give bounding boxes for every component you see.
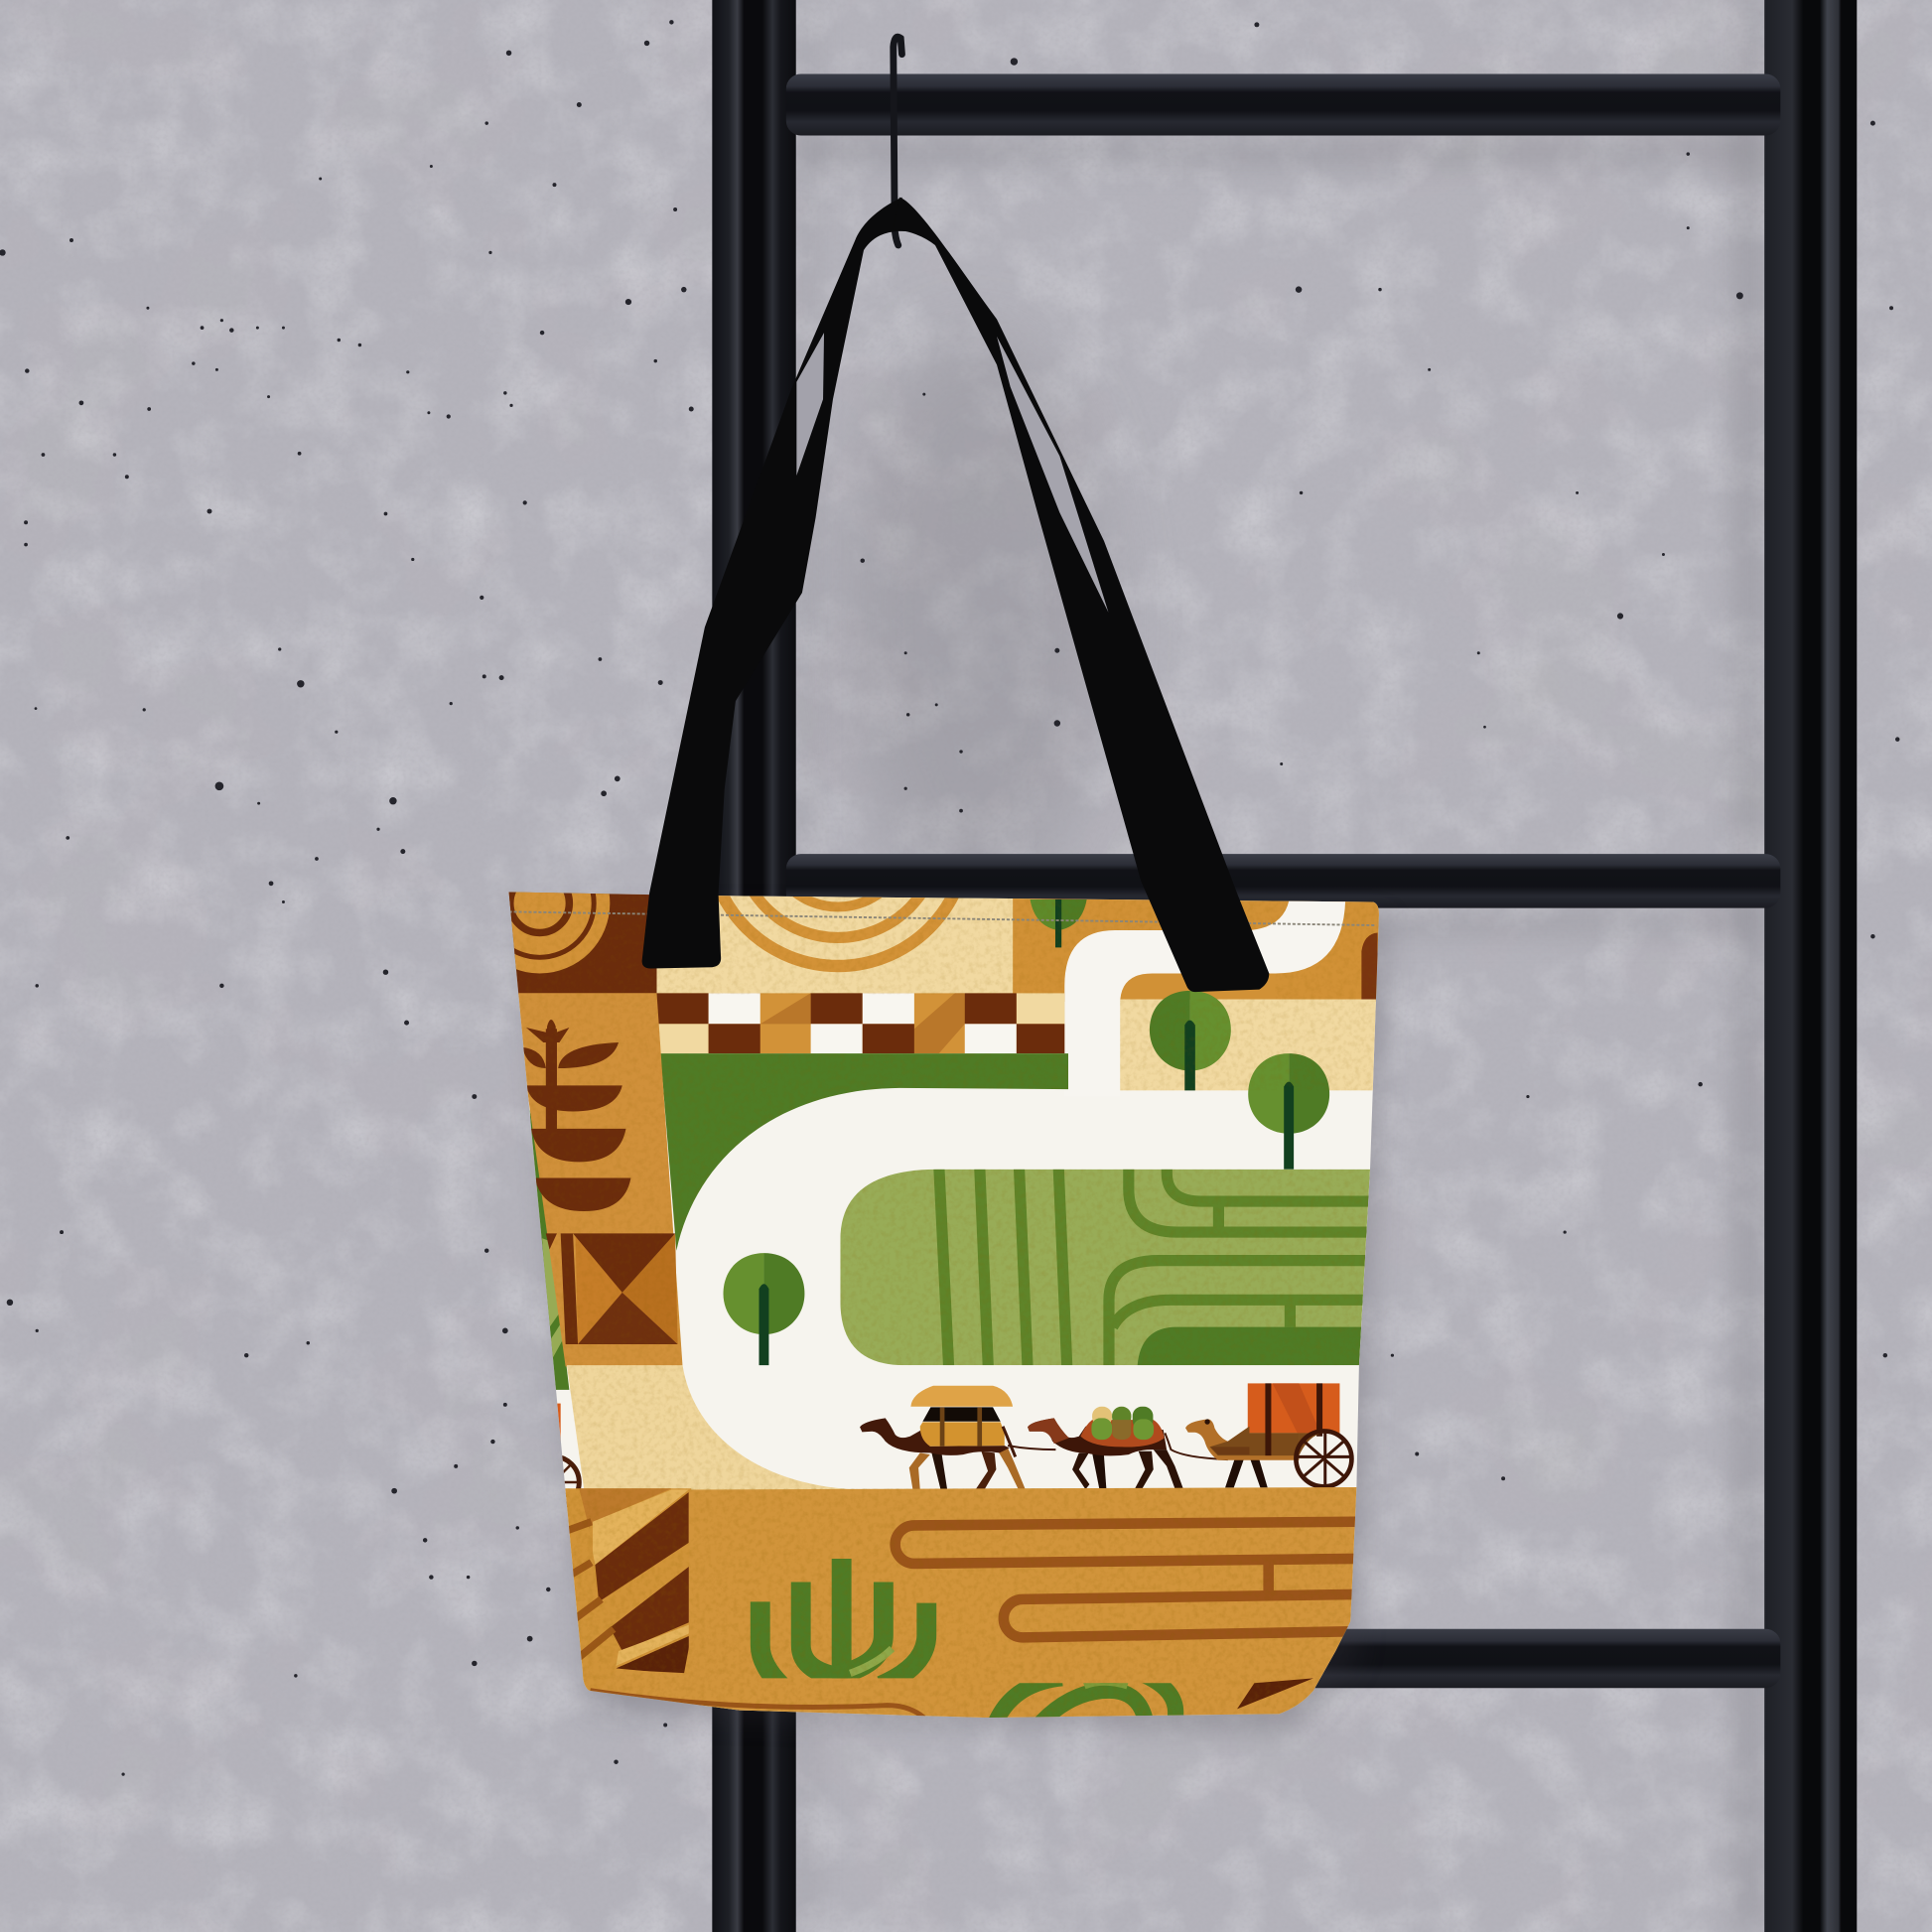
panel: dark green corner <box>660 1053 1068 1251</box>
icon: corner triangle <box>1237 1678 1313 1709</box>
icon: hourglass triangles <box>546 1233 678 1344</box>
camel with bags <box>1028 1407 1228 1489</box>
panel: lower orange band <box>573 1487 1368 1725</box>
lower panel texture <box>554 1488 1392 1734</box>
side gusset: wagon fragment <box>557 1404 582 1507</box>
tree cut at top <box>1031 899 1087 947</box>
tree: right <box>1248 1053 1329 1170</box>
bag shadow on wall <box>523 911 1386 1731</box>
top stitching <box>509 911 1376 925</box>
caravan <box>860 1383 1351 1489</box>
wagon wheel <box>1296 1431 1351 1486</box>
white road upper branch <box>1064 895 1345 1097</box>
field stripes <box>939 1165 1374 1368</box>
panel: cream with arcs <box>657 896 1013 993</box>
camel with wagon <box>1185 1383 1351 1487</box>
icon: lower cactus arches <box>996 1673 1175 1723</box>
front strap right <box>894 198 1269 992</box>
ladder: rungs <box>786 73 1780 1688</box>
icon: plant motif <box>522 1020 630 1211</box>
side gusset: green strip <box>530 1109 569 1390</box>
ladder: right rail <box>1764 0 1857 1932</box>
ladder: left rail <box>712 0 796 1932</box>
tote bag print <box>508 892 1379 1718</box>
hook <box>894 37 901 245</box>
panel: top-left brown block with concentric circles <box>508 892 657 995</box>
lower U lines <box>896 1522 1355 1637</box>
paper texture over print <box>492 881 1392 1731</box>
panel: light green field <box>838 1165 1380 1374</box>
panel: lower gusset fold <box>554 1488 691 1701</box>
panel: cream lower-left <box>567 1365 858 1489</box>
camel with canopy <box>860 1386 1055 1489</box>
tree: upper <box>1150 991 1231 1090</box>
icon: cactus <box>760 1559 926 1688</box>
panel: left orange column <box>514 993 683 1366</box>
tree: left <box>724 1253 804 1365</box>
strap slit right <box>997 337 1108 613</box>
panel: checker band <box>656 993 1066 1053</box>
panel: top-right orange block <box>1013 895 1382 1002</box>
strap slit left <box>796 333 824 476</box>
panel: cream block right <box>1120 1000 1379 1090</box>
bag base fabric <box>492 881 1392 1731</box>
front strap left <box>642 198 909 968</box>
